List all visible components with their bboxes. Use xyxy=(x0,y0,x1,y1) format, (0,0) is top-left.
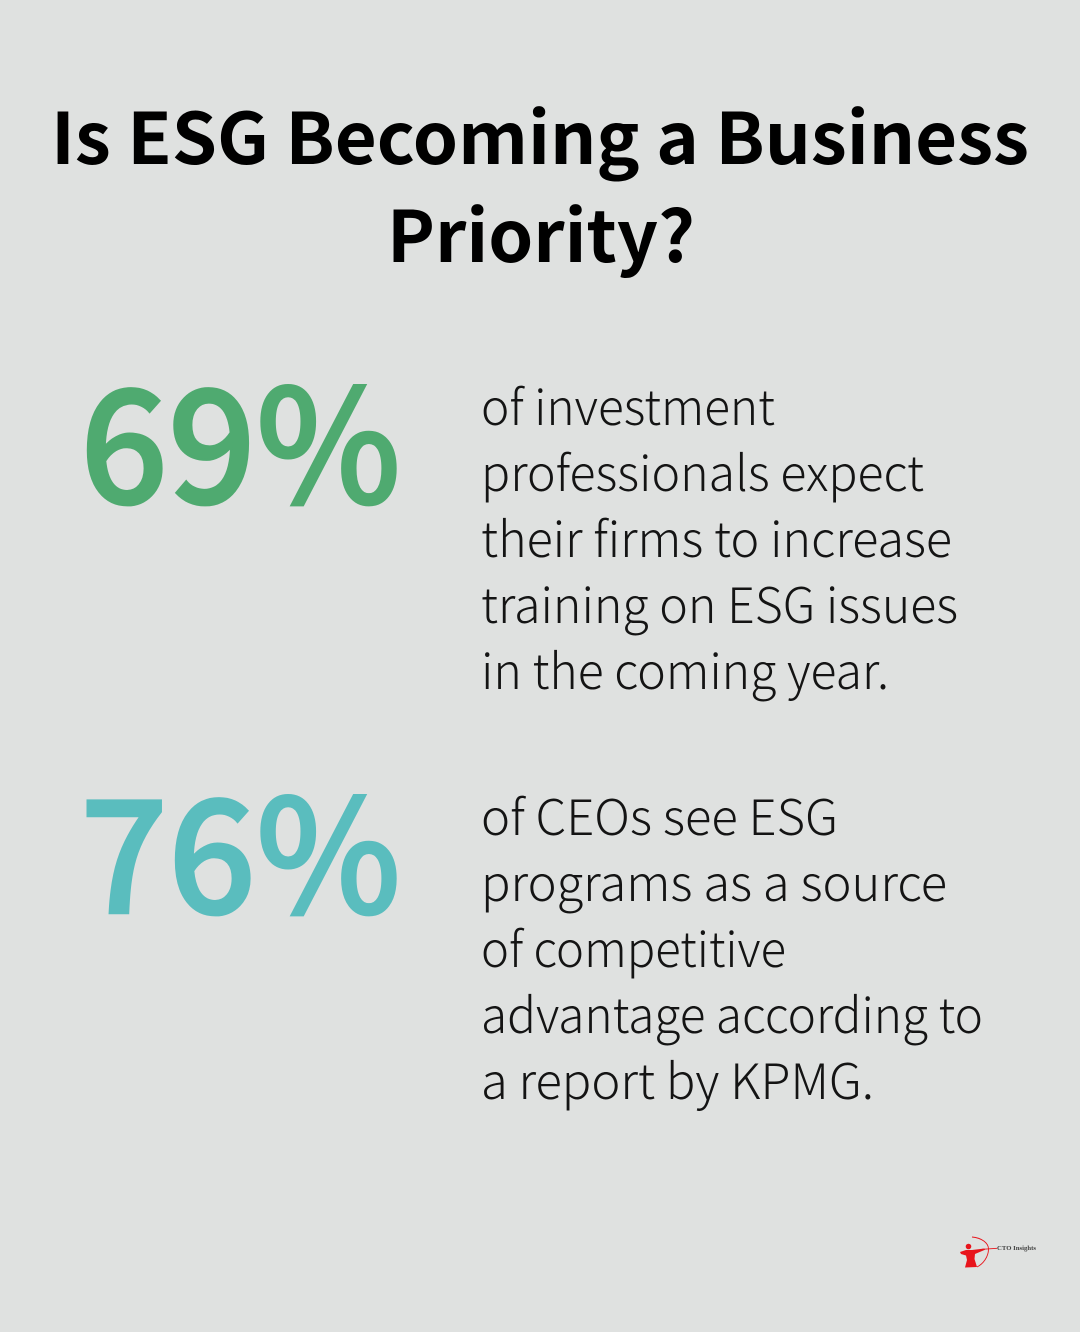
text block: CEOs: advantage according to xyxy=(481,977,983,1048)
text block: investment professionals: professionals expect xyxy=(481,435,924,506)
title: Priority? xyxy=(387,181,695,283)
text block: investment professionals: in the coming year. xyxy=(481,633,889,704)
logo text: CTO Insights xyxy=(997,1246,1037,1252)
logo: CTO Insights xyxy=(960,1237,1037,1268)
stat: 69%: 69% xyxy=(80,322,401,549)
text block: CEOs: of CEOs see ESG xyxy=(481,779,838,850)
text block: CEOs: of competitive xyxy=(481,911,786,982)
title xyxy=(51,83,1029,283)
icon: archer xyxy=(960,1237,997,1268)
title: Is ESG Becoming a Business xyxy=(51,83,1029,185)
text block: investment professionals: of investment xyxy=(481,369,775,440)
text block: investment professionals: their firms to increase xyxy=(481,501,952,572)
text block: CEOs xyxy=(481,779,983,1114)
text block: CEOs: a report by KPMG. xyxy=(481,1043,874,1114)
text block: CEOs: programs as a source xyxy=(481,845,947,916)
text block: investment professionals xyxy=(481,369,958,704)
text block: investment professionals: training on ESG issues xyxy=(481,567,958,638)
stat: 76%: 76% xyxy=(80,732,401,959)
